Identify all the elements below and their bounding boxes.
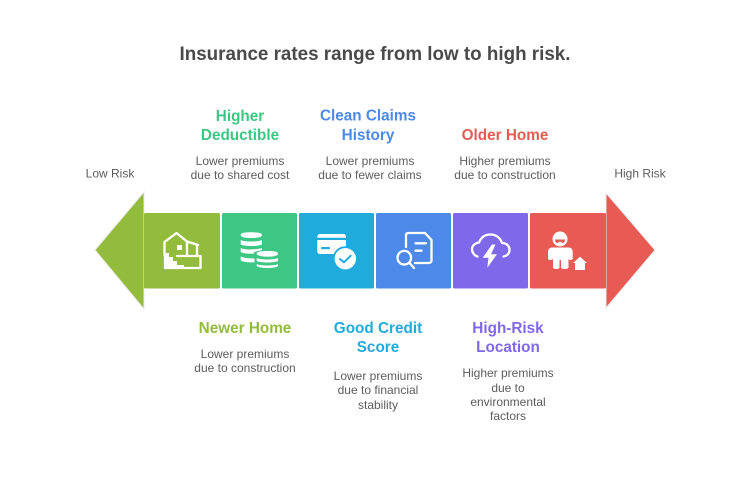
text block: clean claims history: due to fewer claims (318, 168, 422, 182)
segment: good credit score (376, 213, 451, 288)
text block: older home: due to construction (454, 168, 556, 182)
text block: high-risk location: Location (476, 339, 540, 356)
left arrow head (95, 192, 144, 309)
text block: higher deductible: Deductible (201, 127, 279, 144)
segment: high-risk location (453, 213, 528, 288)
text block: high-risk location: environmental (470, 395, 546, 409)
icon: document with magnifier (398, 233, 432, 268)
icon: person with small house (548, 232, 587, 270)
text block: good credit score: Lower premiums (334, 369, 422, 383)
text block: newer home: Newer Home (199, 320, 291, 337)
icon: cloud with lightning (472, 234, 510, 268)
text block: higher deductible (191, 108, 290, 182)
text block: clean claims history: History (342, 127, 395, 144)
text block: newer home: due to construction (194, 361, 296, 375)
text block: clean claims history: Lower premiums (326, 154, 414, 168)
text block: good credit score: stability (358, 398, 398, 412)
text block: newer home (194, 320, 296, 375)
text block: good credit score: Good Credit (334, 320, 422, 337)
icon: coin stacks (241, 232, 278, 268)
icon: house on stairs (164, 233, 200, 269)
text block: higher deductible: due to shared cost (191, 168, 290, 182)
segment: clean claims history (299, 213, 374, 288)
icon: credit card with check (317, 234, 358, 271)
text block: older home: Older Home (462, 127, 548, 144)
segment: older home (530, 213, 606, 288)
text block: high-risk location: Higher premiums (462, 366, 554, 380)
text block: good credit score: Score (357, 339, 399, 356)
text block: clean claims history: Clean Claims (320, 108, 416, 124)
text block: higher deductible: Higher (216, 108, 264, 125)
text block: high-risk location: due to (491, 381, 525, 395)
text block: high-risk location: High-Risk (472, 320, 544, 337)
label: high risk: High Risk (614, 166, 667, 180)
segment: newer home (144, 213, 220, 288)
right arrow head (606, 193, 655, 308)
title: Insurance rates range from low to high risk. (180, 44, 570, 65)
text block: higher deductible: Lower premiums (196, 154, 284, 168)
text block: good credit score: due to financial (338, 383, 418, 397)
text block: high-risk location: factors (490, 409, 526, 423)
segment: higher deductible (222, 213, 297, 288)
text block: older home: Higher premiums (459, 154, 551, 168)
text block: high-risk location (462, 320, 554, 423)
label: low risk: Low Risk (86, 166, 135, 180)
text block: clean claims history (318, 108, 422, 182)
text block: newer home: Lower premiums (201, 347, 289, 361)
text block: older home (454, 127, 556, 182)
text block: good credit score (334, 320, 422, 412)
